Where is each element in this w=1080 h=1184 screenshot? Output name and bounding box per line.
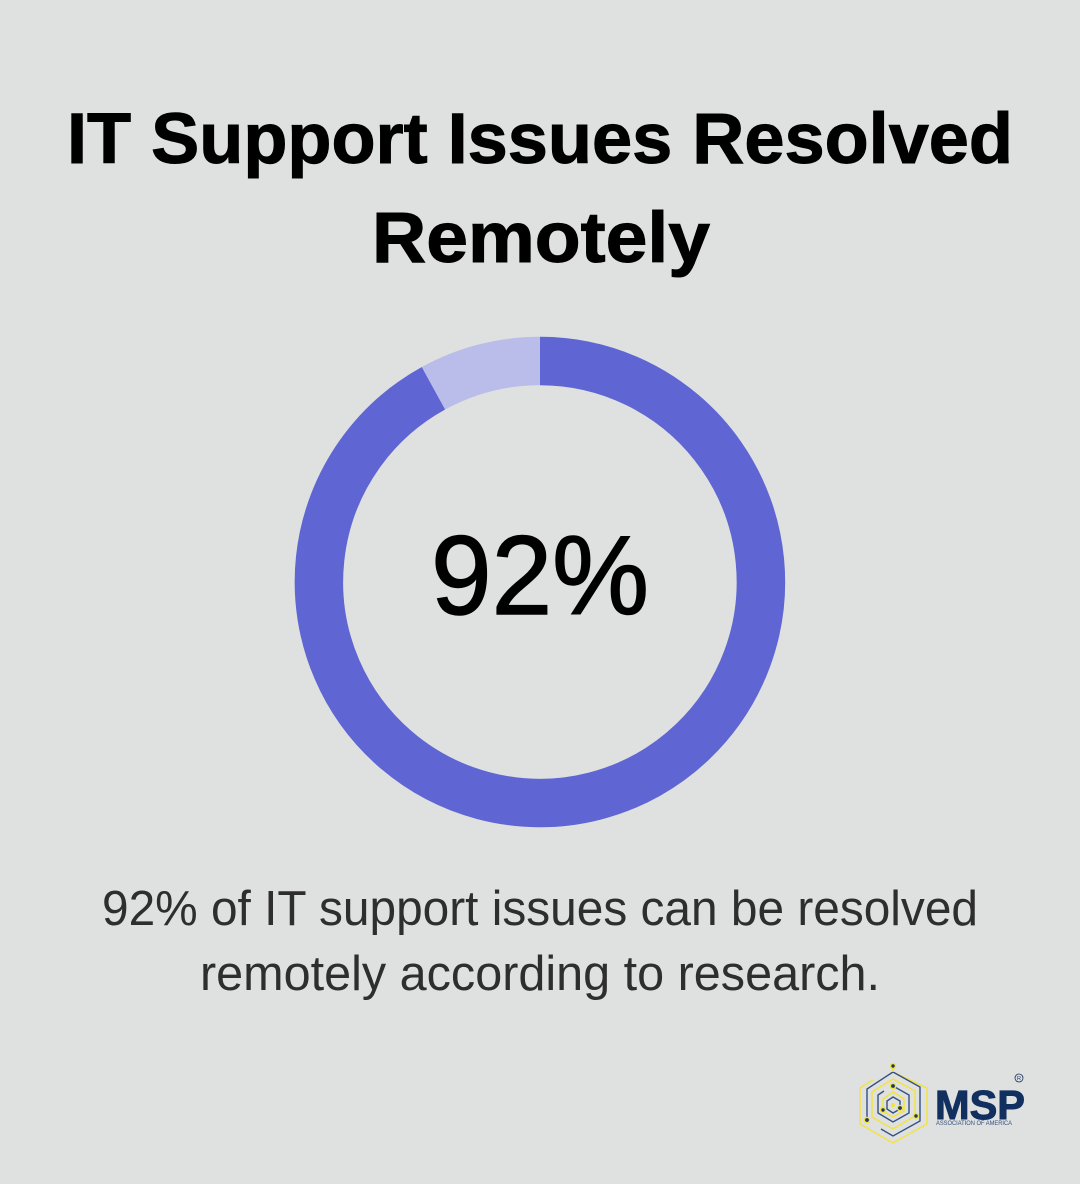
title <box>67 100 1013 278</box>
title: IT Support Issues Resolved <box>67 100 1013 179</box>
logo tagline: ASSOCIATION OF AMERICA <box>936 1121 1012 1127</box>
description text: 92% of IT support issues can be resolved <box>102 882 978 936</box>
donut center value: 92% <box>431 513 649 638</box>
donut chart: 92 percent <box>319 361 761 803</box>
logo wordmark: MSP <box>935 1082 1025 1128</box>
logo registered mark: R <box>1017 1076 1021 1082</box>
logo icon: nested hexagons <box>860 1064 927 1143</box>
description text <box>102 882 978 1001</box>
donut segment: remaining 8% <box>434 361 540 388</box>
title: Remotely <box>372 199 711 278</box>
logo registered mark <box>1015 1074 1023 1082</box>
donut segment: resolved remotely 92% <box>319 361 761 803</box>
description text: remotely according to research. <box>200 947 880 1001</box>
logo: MSP Association of America <box>860 1064 1025 1143</box>
